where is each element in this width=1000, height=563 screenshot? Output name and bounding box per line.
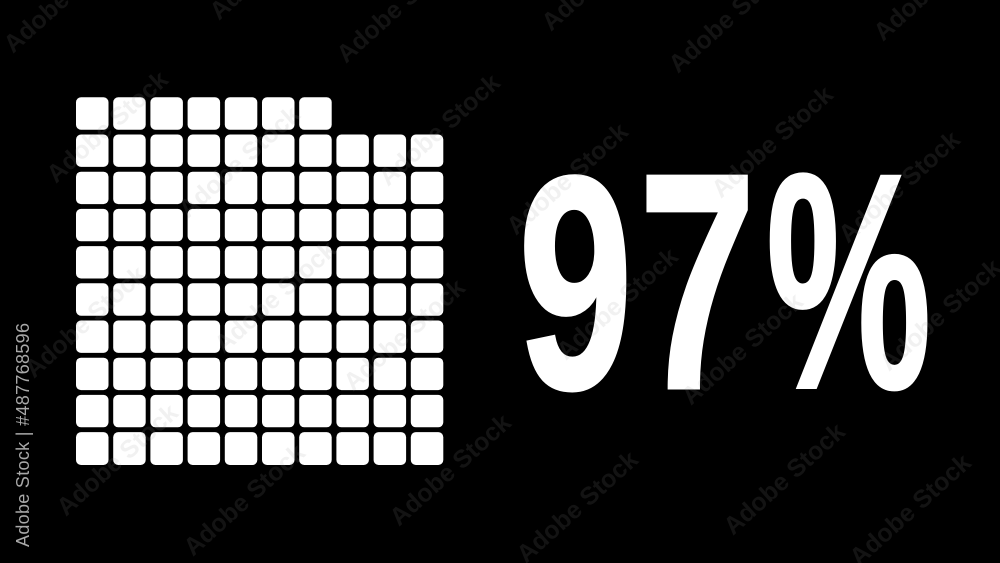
watermarks: Adobe Stock [833, 125, 966, 248]
watermarks: Adobe Stock [384, 408, 517, 531]
watermarks: Adobe Stock [41, 65, 174, 188]
watermarks: Adobe Stock [51, 398, 184, 521]
waffle chart: 97 of 100 squares filled [76, 97, 443, 465]
watermarks: Adobe Stock [501, 117, 634, 240]
watermarks: Adobe Stock [551, 242, 684, 365]
watermarks: Adobe Stock [718, 417, 851, 540]
watermarks: Adobe Stock [173, 100, 306, 223]
percentage value: 97%: 7 [638, 109, 756, 453]
watermarks: Adobe Stock [676, 287, 809, 410]
percentage value: 97%: % [766, 109, 931, 453]
watermarks: Adobe Stock [178, 438, 311, 561]
stock id label: Adobe Stock | #487768596 [13, 323, 33, 547]
percentage value: 97%: 9 [518, 114, 633, 453]
watermarks: Adobe Stock [373, 68, 506, 191]
watermarks: Adobe Stock [19, 260, 152, 383]
watermarks: Adobe Stock [706, 80, 839, 203]
watermarks: Adobe Stock [209, 235, 342, 358]
percentage value: 97% [518, 109, 931, 453]
watermarks: Adobe Stock [338, 273, 471, 396]
